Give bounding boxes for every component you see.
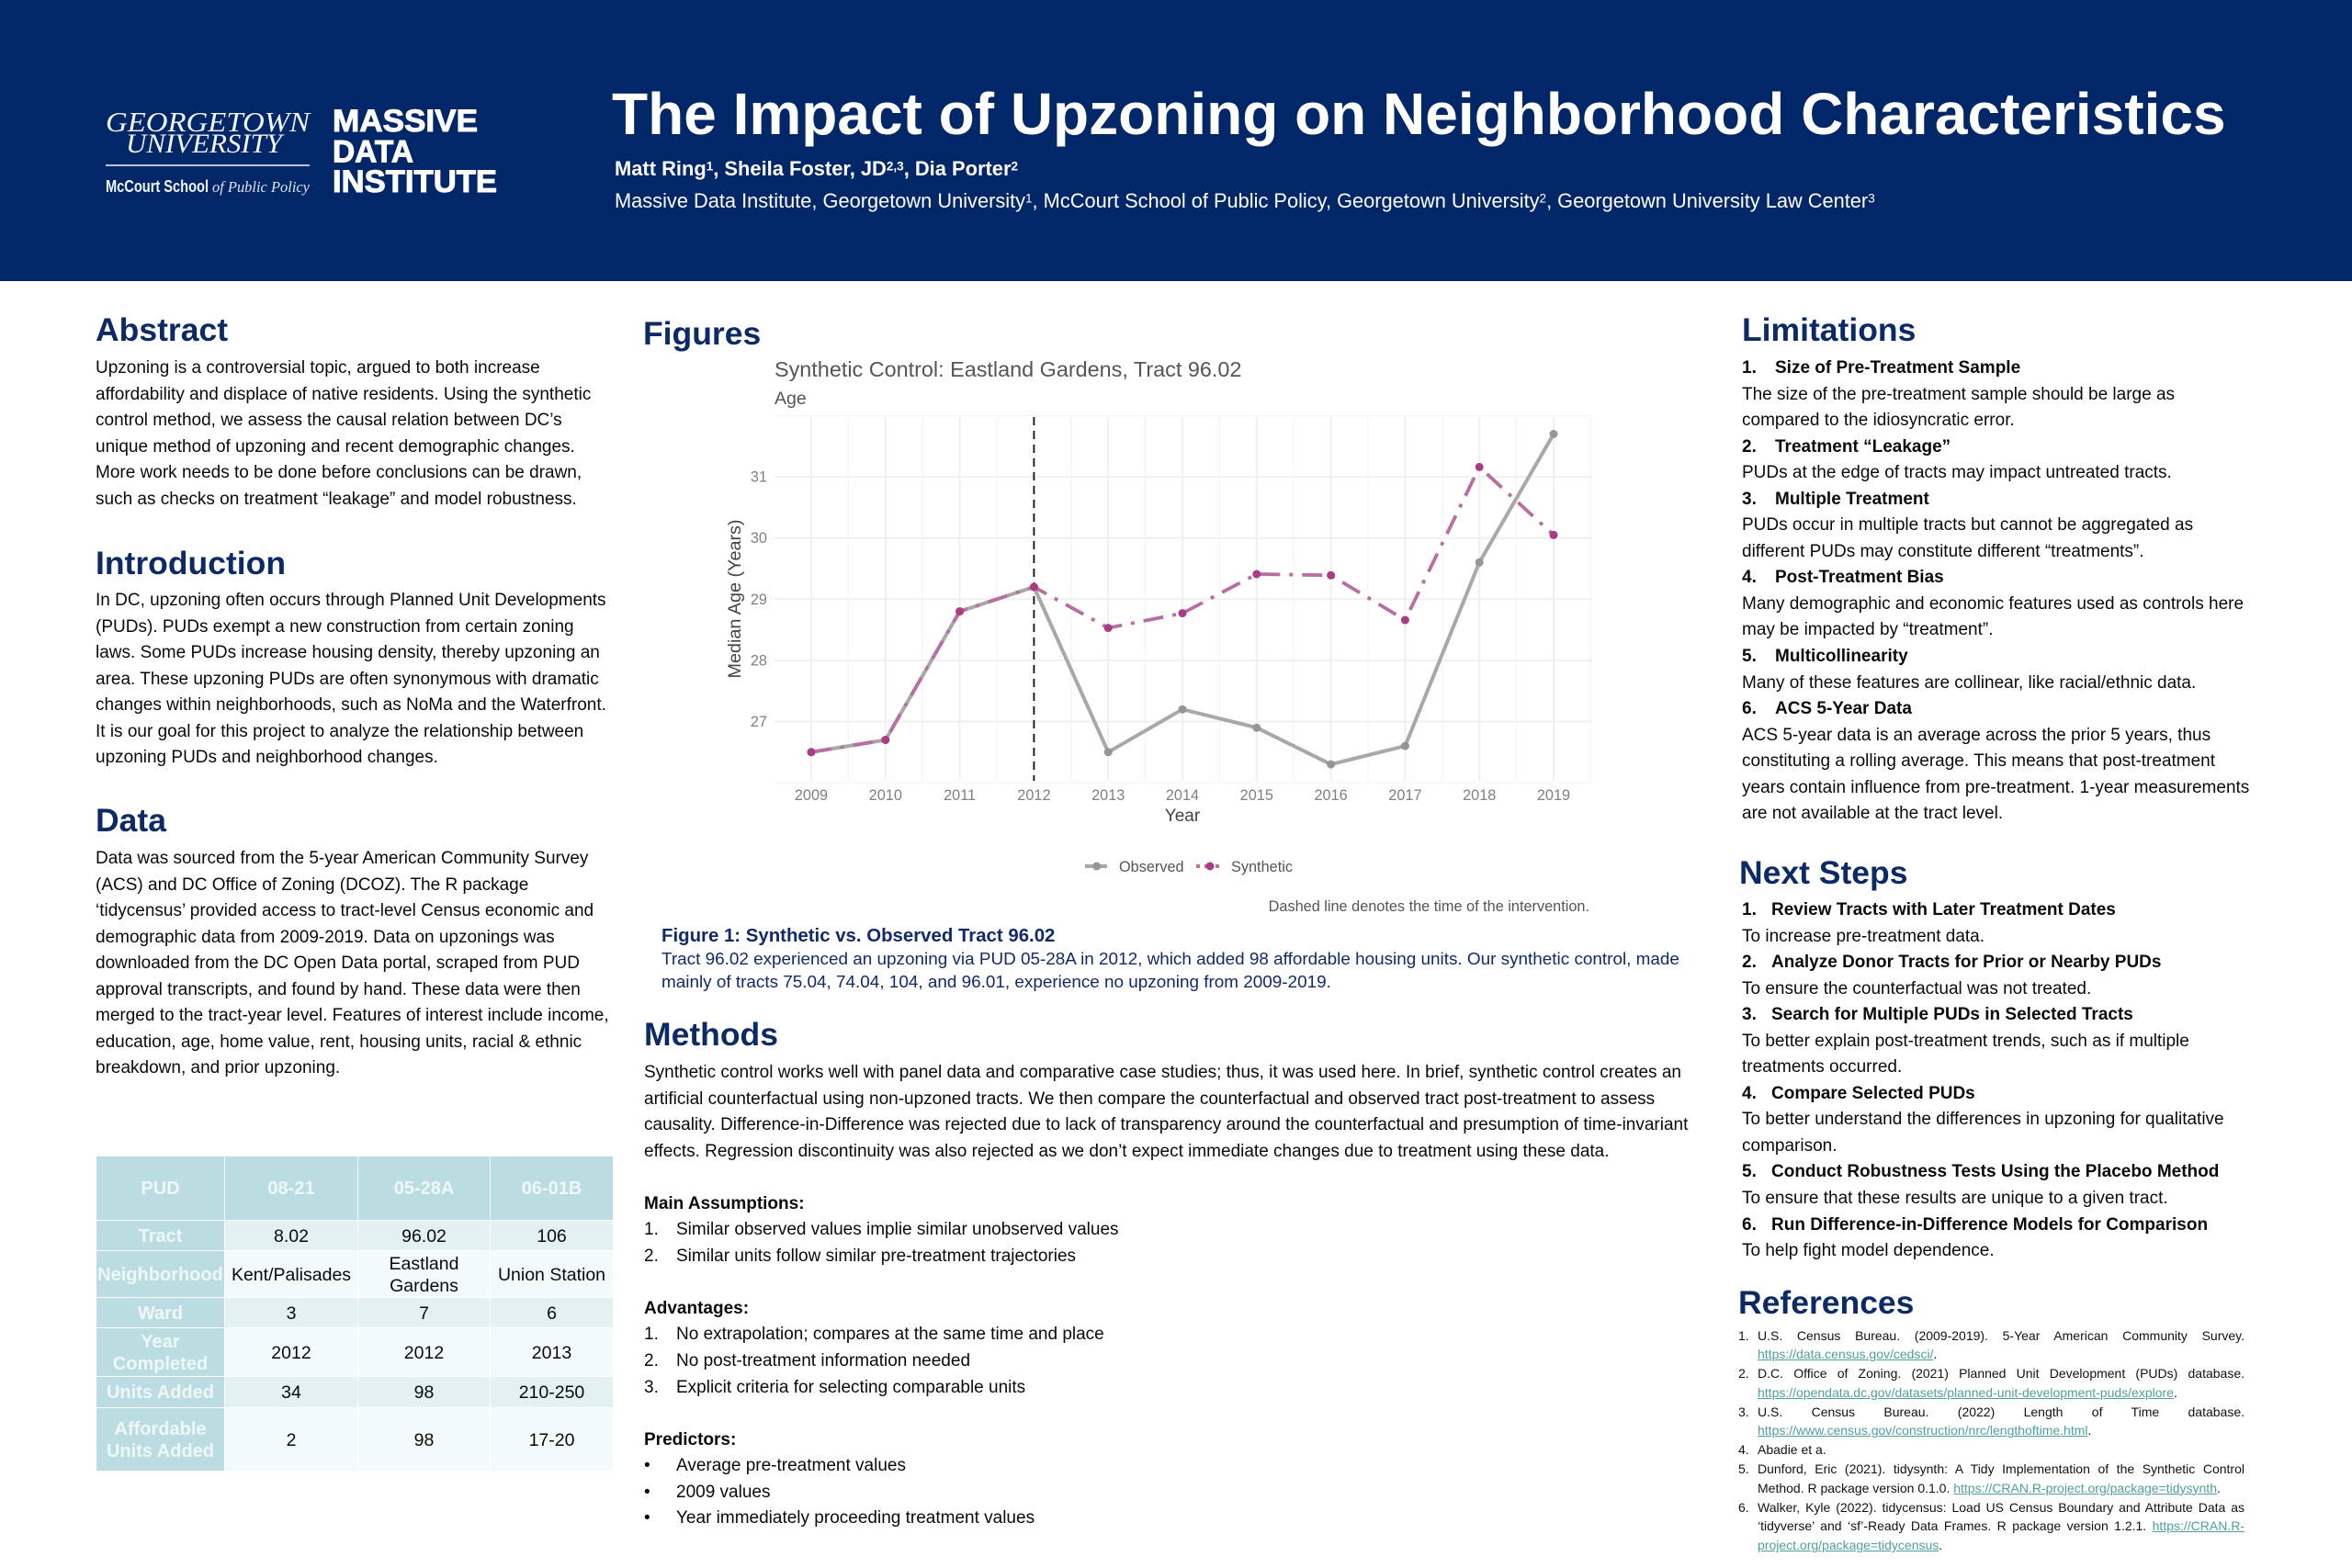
x axis ticks: 2017 [1388, 787, 1422, 804]
text: next steps: Analyze Donor Tracts for Prior or Nearby PUDs [1771, 953, 2161, 972]
text: references list: U.S. Census Bureau. (2009-2019). 5-Year American Community Survey. [1758, 1328, 2245, 1343]
text: limitations: ACS 5-year data is an average across the prior 5 years, thus [1742, 726, 2211, 745]
text: limitations: The size of the pre-treatment sample should be large as [1742, 385, 2175, 404]
text: limitations: may be impacted by “treatment”. [1742, 620, 1994, 639]
table: PUD summary: 3 [287, 1303, 296, 1324]
text: next steps: To better explain post-treatment trends, such as if multiple [1742, 1032, 2189, 1051]
text: methods: effects. Regression discontinuity was also rejected as we don’t expect immediate changes due to treatment using these data. [644, 1142, 1610, 1161]
text: next steps: To increase pre-treatment data. [1742, 927, 1984, 946]
text: limitations: 3. [1742, 490, 1757, 509]
text: next steps: To ensure the counterfactual was not treated. [1742, 979, 2091, 998]
table: PUD summary: 2012 [271, 1343, 311, 1363]
text: limitations: 4. [1742, 568, 1757, 587]
text: abstract: More work needs to be done before conclusions can be drawn, [96, 463, 582, 482]
x axis ticks [795, 787, 1570, 804]
table: PUD summary: 2012 [404, 1343, 444, 1363]
figure caption: Figure 1: Synthetic vs. Observed Tract 96.02 [662, 926, 1055, 946]
logo: Massive Data Institute: DATA [333, 134, 413, 169]
text: next steps: Compare Selected PUDs [1771, 1084, 1975, 1103]
text: references list: 3. [1738, 1404, 1749, 1419]
text: references list: Walker, Kyle (2022). tidycensus: Load US Census Boundary and Attribute Data as [1758, 1500, 2245, 1515]
text: next steps: To help fight model dependence. [1742, 1241, 1995, 1260]
text: methods: 2009 values [676, 1483, 770, 1502]
text: data: (ACS) and DC Office of Zoning (DCOZ). The R package [96, 875, 528, 895]
text: methods: Similar units follow similar pre-treatment trajectories [676, 1247, 1076, 1266]
table: PUD summary: 17-20 [529, 1430, 574, 1450]
text: next steps [1742, 900, 2224, 1260]
observed series [807, 430, 1558, 769]
text: limitations: PUDs at the edge of tracts may impact untreated tracts. [1742, 463, 2172, 482]
y axis ticks: 30 [751, 530, 767, 547]
affiliations: Massive Data Institute, Georgetown University1, McCourt School of Public Policy, Georgetown University2, Georgetown University Law Center3 [615, 189, 1875, 212]
logo: Georgetown University McCourt School [106, 106, 311, 196]
text: methods: Year immediately proceeding treatment values [676, 1508, 1035, 1528]
text: abstract: such as checks on treatment “leakage” and model robustness. [96, 490, 577, 509]
text: data [96, 849, 609, 1077]
text: methods: No post-treatment information needed [676, 1351, 970, 1371]
table: PUD summary: 06-01B [522, 1179, 582, 1199]
legend: Observed [1119, 859, 1184, 875]
figure caption: mainly of tracts 75.04, 74.04, 104, and 96.01, experience no upzoning from 2009-2019. [662, 973, 1331, 992]
text: references list: https://opendata.dc.gov/datasets/planned-unit-development-puds/explore. [1758, 1385, 2177, 1400]
text: methods: 2. [644, 1247, 659, 1266]
heading: Methods: Methods [644, 1016, 778, 1053]
text: methods: Predictors: [644, 1430, 736, 1450]
y axis ticks [751, 469, 767, 730]
text: next steps: Run Difference-in-Difference Models for Comparison [1771, 1215, 2208, 1235]
text: introduction: It is our goal for this project to analyze the relationship between [96, 722, 583, 741]
heading: Limitations: Limitations [1742, 311, 1916, 348]
text: limitations: Many of these features are collinear, like racial/ethnic data. [1742, 673, 2196, 693]
text: limitations: constituting a rolling average. This means that post-treatment [1742, 751, 2215, 771]
text: next steps: 5. [1742, 1162, 1757, 1181]
text: next steps: comparison. [1742, 1136, 1838, 1156]
chart note: Dashed line denotes the time of the intervention. [1269, 898, 1589, 915]
table: PUD summary: 7 [419, 1303, 429, 1324]
text: limitations: 1. [1742, 358, 1757, 378]
text: abstract: Upzoning is a controversial topic, argued to both increase [96, 358, 540, 378]
table: PUD summary: 6 [547, 1303, 557, 1324]
text: next steps: 2. [1742, 953, 1757, 972]
text: limitations: PUDs occur in multiple tracts but cannot be aggregated as [1742, 515, 2193, 535]
heading: References: References [1738, 1284, 1914, 1321]
text: references list: 4. [1738, 1442, 1749, 1457]
text: methods: Advantages: [644, 1299, 749, 1318]
text: data: Data was sourced from the 5-year American Community Survey [96, 849, 588, 868]
text: methods: 1. [644, 1220, 659, 1239]
text: methods: Synthetic control works well with panel data and comparative case studies; thus, it was used here. In brief, synthetic control creates an [644, 1063, 1681, 1082]
text: next steps: To better understand the differences in upzoning for qualitative [1742, 1110, 2224, 1129]
chart subtitle: Age [775, 389, 807, 409]
text: references list: ‘tidyverse’ and ‘sf’-Ready Data Frames. R package version 1.2.1. https://CRAN.R- [1758, 1518, 2245, 1533]
table: PUD summary [96, 1156, 613, 1471]
text: next steps: 6. [1742, 1215, 1757, 1235]
text: introduction: area. These upzoning PUDs are often synonymous with dramatic [96, 670, 599, 689]
text: limitations: Size of Pre-Treatment Sample [1775, 358, 2020, 378]
text: references list: https://www.census.gov/construction/nrc/lengthoftime.html. [1758, 1423, 2091, 1438]
table: PUD summary: Neighborhood [97, 1265, 223, 1285]
text: introduction: (PUDs). PUDs exempt a new construction from certain zoning [96, 617, 574, 637]
figure caption: Tract 96.02 experienced an upzoning via PUD 05-28A in 2012, which added 98 affordable housing units. Our synthetic control, made [662, 950, 1679, 969]
text: data: merged to the tract-year level. Features of interest include income, [96, 1006, 609, 1025]
text: methods: 2. [644, 1351, 659, 1371]
text: methods: • [644, 1508, 650, 1528]
text: limitations: 6. [1742, 699, 1757, 718]
table: PUD summary: 2 [287, 1430, 296, 1450]
y axis ticks: 27 [751, 714, 767, 730]
text: introduction: laws. Some PUDs increase housing density, thereby upzoning an [96, 643, 600, 662]
text: methods: Main Assumptions: [644, 1194, 805, 1213]
synthetic series [807, 463, 1558, 756]
text: data: demographic data from 2009-2019. Data on upzonings was [96, 928, 555, 947]
table: PUD summary: Completed [113, 1354, 208, 1374]
text: next steps: Search for Multiple PUDs in Selected Tracts [1771, 1005, 2133, 1024]
text: methods: artificial counterfactual using non-upzoned tracts. We then compare the counterfactual and observed tract post-treatment to assess [644, 1089, 1655, 1109]
logo: Georgetown University McCourt School: UNIVERSITY [126, 129, 285, 159]
text: next steps: Review Tracts with Later Treatment Dates [1771, 900, 2116, 919]
text: introduction: In DC, upzoning often occurs through Planned Unit Developments [96, 591, 606, 610]
text: introduction [96, 591, 606, 767]
x axis ticks: 2016 [1314, 787, 1348, 804]
x axis ticks: 2010 [869, 787, 902, 804]
logo: Massive Data Institute [333, 104, 497, 197]
text: data: downloaded from the DC Open Data portal, scraped from PUD [96, 953, 580, 973]
text: limitations: compared to the idiosyncratic error. [1742, 411, 2015, 430]
text: methods: Average pre-treatment values [676, 1456, 906, 1475]
table: PUD summary: Ward [138, 1303, 183, 1324]
text: methods: • [644, 1483, 650, 1502]
logo: Massive Data Institute: MASSIVE [333, 104, 478, 139]
table: PUD summary: PUD [141, 1179, 180, 1199]
intervention dashed line [1033, 417, 1035, 781]
text: limitations: are not available at the tract level. [1742, 804, 2003, 823]
text: limitations: Many demographic and economic features used as controls here [1742, 594, 2244, 614]
text: next steps: 1. [1742, 900, 1757, 919]
text: references list [1738, 1328, 2245, 1552]
figure caption [662, 926, 1679, 992]
table: PUD summary: 2013 [532, 1343, 571, 1363]
table: PUD summary: 05-28A [394, 1179, 454, 1199]
x axis ticks: 2012 [1017, 787, 1051, 804]
line chart: synthetic vs observed median age [725, 357, 1592, 915]
header banner [0, 0, 2352, 281]
heading: Data: Data [96, 802, 166, 839]
text: data: breakdown, and prior upzoning. [96, 1058, 340, 1077]
table: PUD summary: Kent/Palisades [232, 1265, 351, 1285]
text: limitations: Post-Treatment Bias [1775, 568, 1944, 587]
text: abstract: unique method of upzoning and recent demographic changes. [96, 437, 575, 457]
text: methods: causality. Difference-in-Difference was rejected due to lack of transparency around the counterfactual and presumption of time-invariant [644, 1115, 1688, 1134]
legend [1085, 859, 1293, 875]
y axis ticks: 31 [751, 469, 767, 486]
text: limitations: 2. [1742, 437, 1757, 457]
table: PUD summary: Units Added [107, 1440, 214, 1461]
table: PUD summary: 8.02 [274, 1226, 309, 1247]
text: references list: Dunford, Eric (2021). tidysynth: A Tidy Implementation of the Synthetic Control [1758, 1461, 2245, 1476]
x axis ticks: 2015 [1240, 787, 1273, 804]
y axis title: Median Age (Years) [725, 519, 745, 679]
text: methods: No extrapolation; compares at the same time and place [676, 1325, 1104, 1344]
authors: Matt Ring1, Sheila Foster, JD2,3, Dia Porter2 [615, 157, 1018, 180]
heading: Next Steps: Next Steps [1739, 854, 1907, 891]
table: PUD summary: Year [141, 1332, 180, 1352]
text: methods: 3. [644, 1378, 659, 1397]
title: The Impact of Upzoning on Neighborhood Characteristics [612, 81, 2226, 147]
text: references list: Abadie et a. [1758, 1442, 1826, 1457]
text: limitations [1742, 358, 2249, 823]
text: limitations: different PUDs may constitute different “treatments”. [1742, 542, 2144, 561]
text: limitations: Treatment “Leakage” [1775, 437, 1951, 457]
text: next steps: To ensure that these results are unique to a given tract. [1742, 1189, 2168, 1208]
table: PUD summary: 96.02 [401, 1226, 447, 1247]
x axis title: Year [1165, 807, 1201, 826]
text: references list: Method. R package version 0.1.0. https://CRAN.R-project.org/package=tidysynth. [1758, 1481, 2221, 1495]
x axis ticks: 2011 [944, 787, 976, 804]
table: PUD summary: Tract [139, 1226, 182, 1247]
table: PUD summary: 34 [281, 1382, 301, 1403]
text: data: education, age, home value, rent, housing units, racial & ethnic [96, 1032, 582, 1052]
text: references list: project.org/package=tidycensus. [1758, 1538, 1942, 1552]
table: PUD summary: 98 [414, 1430, 434, 1450]
x axis ticks: 2019 [1537, 787, 1570, 804]
text: next steps: 4. [1742, 1084, 1757, 1103]
table: PUD summary: 106 [537, 1226, 567, 1247]
text: methods [644, 1063, 1689, 1528]
text: methods: 1. [644, 1325, 659, 1344]
table: PUD summary: 210-250 [519, 1382, 584, 1403]
heading: Figures: Figures [643, 315, 761, 352]
x axis ticks: 2013 [1091, 787, 1125, 804]
text: methods: Similar observed values implie similar unobserved values [676, 1220, 1119, 1239]
chart title: Synthetic Control: Eastland Gardens, Tract 96.02 [775, 357, 1241, 381]
logo: Georgetown University McCourt School: McCourt School [106, 177, 209, 196]
text: references list: 5. [1738, 1461, 1749, 1476]
text: references list: 1. [1738, 1328, 1749, 1343]
text: methods: Explicit criteria for selecting comparable units [676, 1378, 1025, 1397]
text: data: approval transcripts, and found by hand. These data were then [96, 980, 581, 999]
x axis ticks: 2009 [795, 787, 828, 804]
text: methods: • [644, 1456, 650, 1475]
logo: Georgetown University McCourt School: of Public Policy [212, 178, 310, 196]
table: PUD summary: Union Station [498, 1265, 605, 1285]
heading: Introduction: Introduction [96, 545, 286, 581]
text: references list: 6. [1738, 1500, 1749, 1515]
text: references list: 2. [1738, 1366, 1749, 1381]
table: PUD summary: Eastland [390, 1254, 458, 1274]
table: PUD summary: 08-21 [267, 1179, 315, 1199]
text: references list: D.C. Office of Zoning. (2021) Planned Unit Development (PUDs) database. [1758, 1366, 2245, 1381]
text: next steps: Conduct Robustness Tests Using the Placebo Method [1771, 1162, 2219, 1181]
y axis ticks: 29 [751, 592, 767, 608]
text: next steps: 3. [1742, 1005, 1757, 1024]
text: references list: U.S. Census Bureau. (2022) Length of Time database. [1758, 1404, 2245, 1419]
logo: Georgetown University McCourt School: GEORGETOWN [106, 106, 311, 138]
text: abstract [96, 358, 591, 509]
text: references list: https://data.census.gov/cedsci/. [1758, 1347, 1937, 1361]
table: PUD summary: Affordable [114, 1419, 206, 1439]
table: PUD summary: Gardens [390, 1275, 458, 1295]
text: limitations: ACS 5-Year Data [1775, 699, 1912, 718]
x axis ticks: 2014 [1166, 787, 1199, 804]
text: abstract: control method, we assess the causal relation between DC’s [96, 411, 562, 430]
text: limitations: Multicollinearity [1775, 647, 1908, 666]
text: introduction: changes within neighborhoods, such as NoMa and the Waterfront. [96, 695, 606, 715]
table: PUD summary: Units Added [107, 1382, 214, 1403]
text: data: ‘tidycensus’ provided access to tract-level Census economic and [96, 901, 594, 920]
legend: Synthetic [1231, 859, 1293, 875]
text: limitations: 5. [1742, 647, 1757, 666]
text: introduction: upzoning PUDs and neighborhood changes. [96, 748, 438, 767]
text: limitations: years contain influence from pre-treatment. 1-year measurements [1742, 778, 2249, 797]
heading: Abstract: Abstract [96, 311, 228, 348]
text: abstract: affordability and displace of native residents. Using the synthetic [96, 385, 591, 404]
y axis ticks: 28 [751, 652, 767, 669]
table: PUD summary: 98 [414, 1382, 434, 1403]
text: limitations: Multiple Treatment [1775, 490, 1929, 509]
text: next steps: treatments occurred. [1742, 1057, 1902, 1077]
x axis ticks: 2018 [1463, 787, 1496, 804]
